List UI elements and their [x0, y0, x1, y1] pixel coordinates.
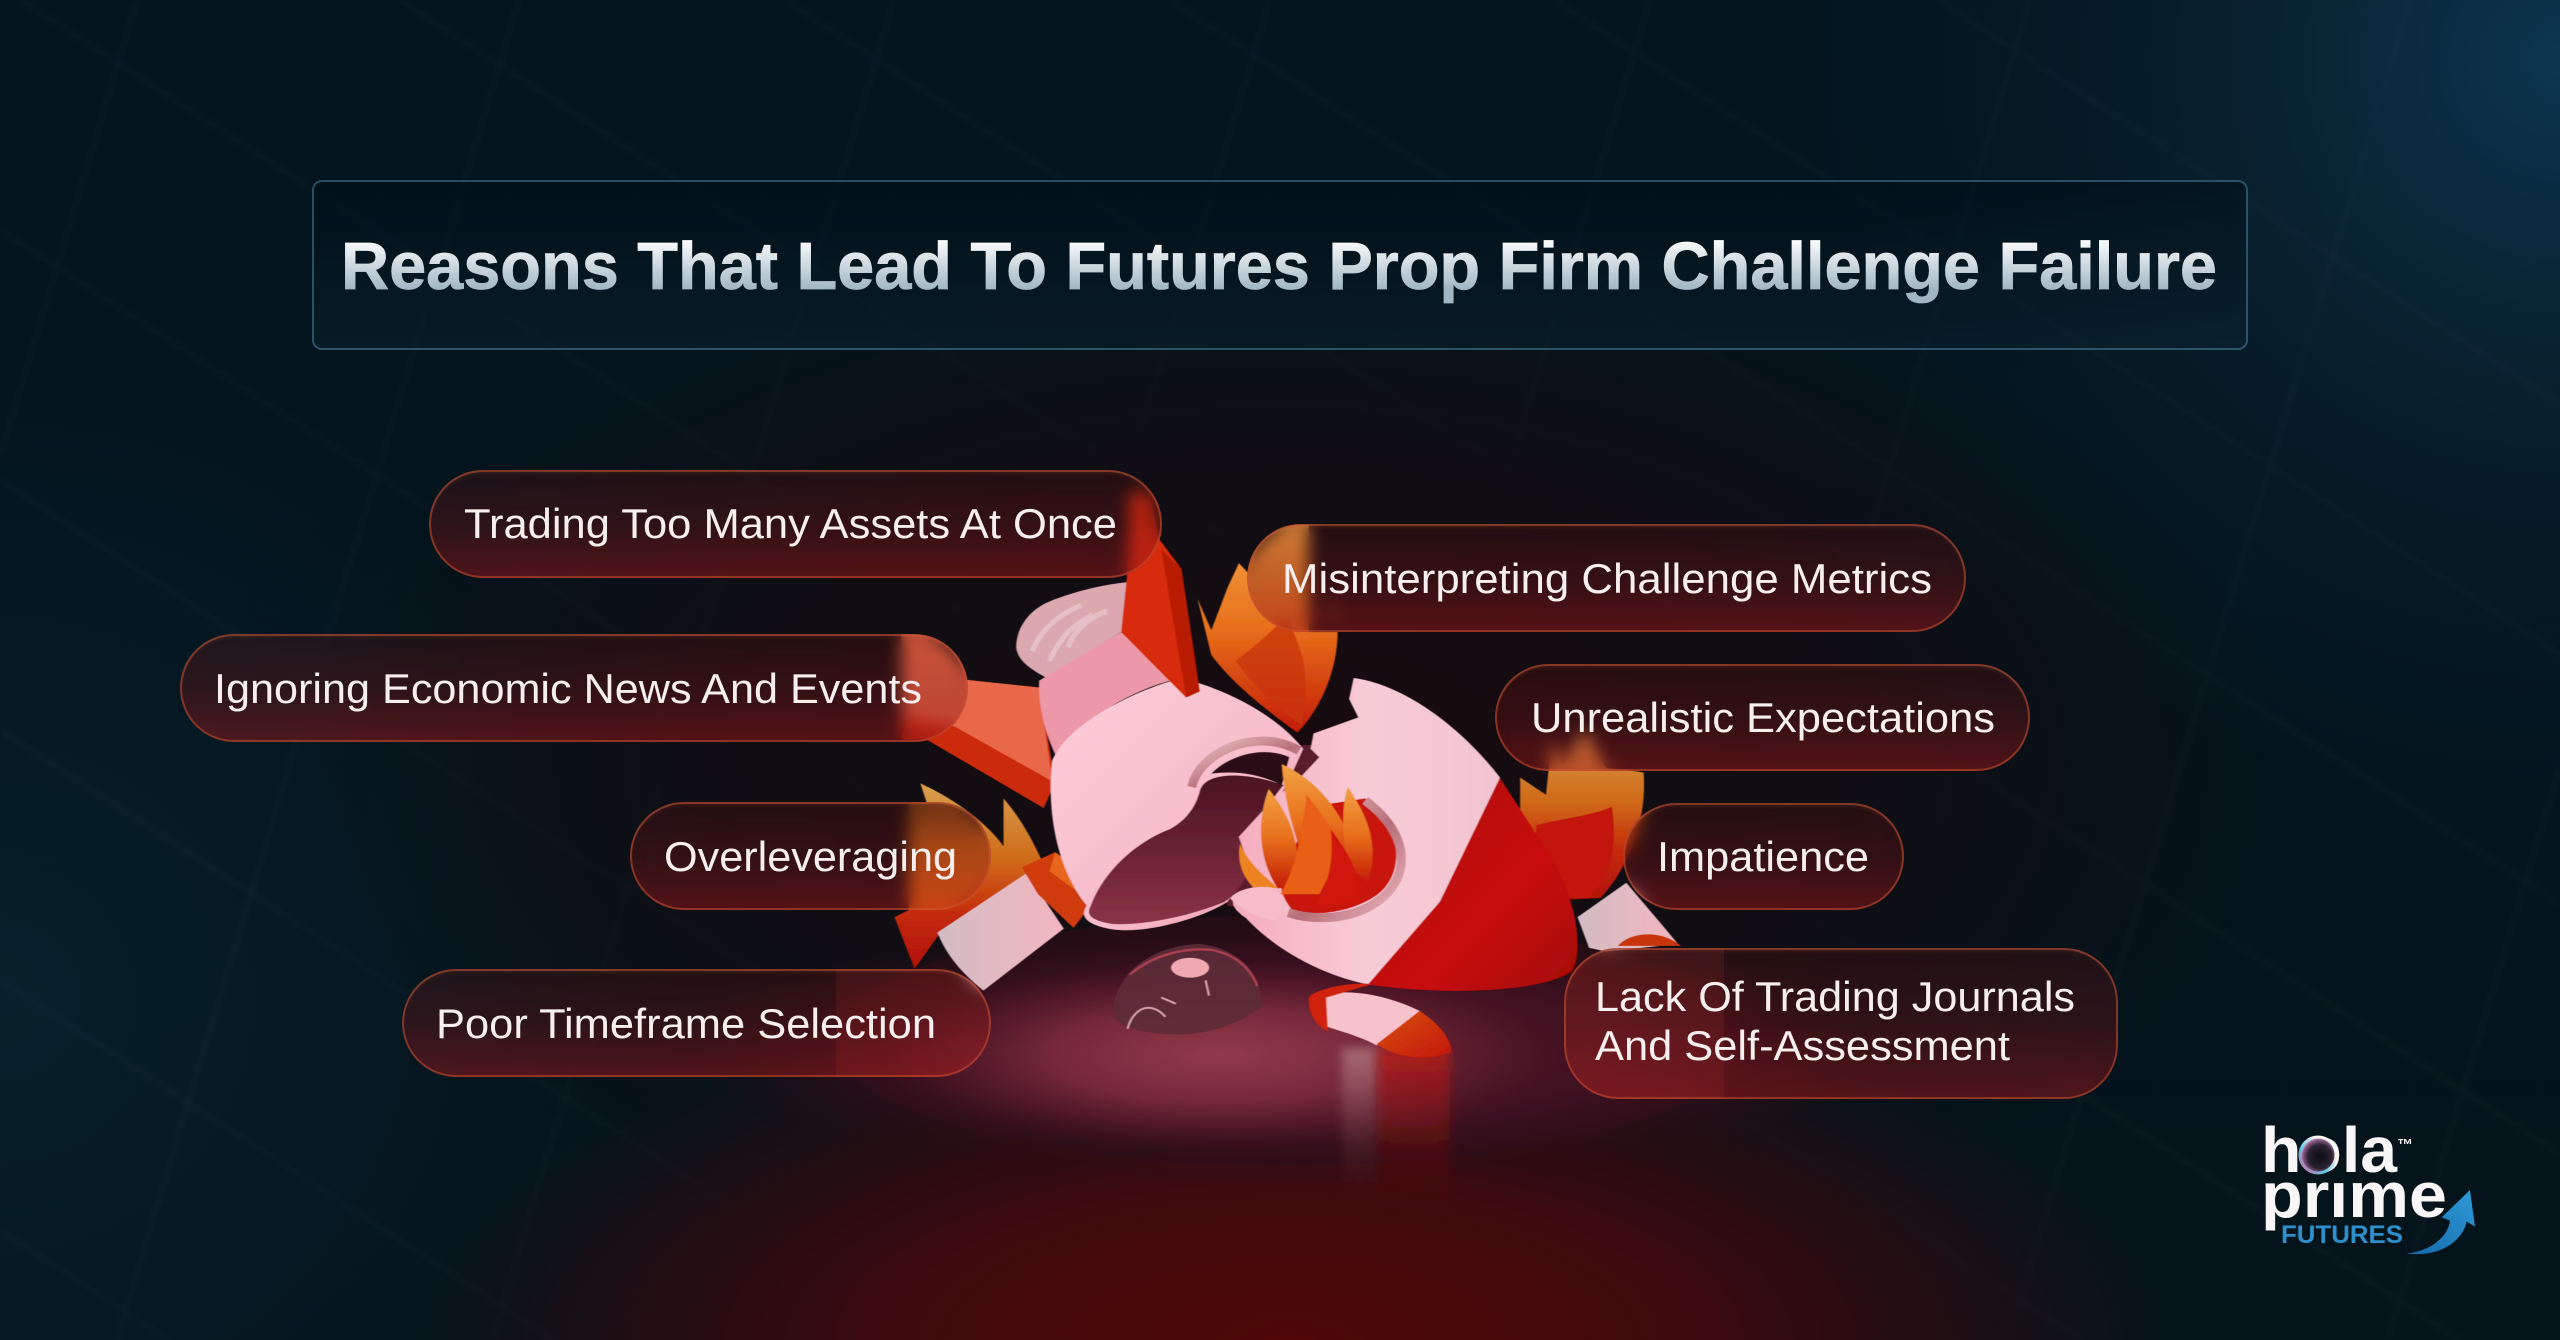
pill: trading too many assets	[429, 470, 1162, 578]
pill: impatience	[1623, 803, 1904, 910]
glass dome	[1113, 944, 1262, 1034]
inner flames	[1239, 764, 1373, 906]
pill: lack of trading journals	[1564, 948, 2118, 1099]
pill: misinterpreting challenge metrics	[1247, 524, 1966, 632]
pill: misinterpreting challenge metrics: Misinterpreting Challenge Metrics	[1282, 555, 1932, 602]
mouth	[1281, 799, 1396, 913]
centre backing	[1204, 745, 1365, 915]
back flames right	[1520, 730, 1644, 902]
translucent cap	[1016, 582, 1127, 678]
pill: unrealistic expectations	[1495, 664, 2030, 771]
logo: hola prime futures	[2266, 1126, 2475, 1254]
pill: lack of trading journals: Lack Of Trading Journals	[1595, 973, 2075, 1020]
pill: impatience: Impatience	[1657, 833, 1869, 880]
title panel	[312, 180, 2248, 350]
pill: poor timeframe selection: Poor Timeframe Selection	[436, 1000, 936, 1047]
detached limb	[1309, 984, 1451, 1058]
lower lip	[1230, 887, 1292, 921]
pill: ignoring economic news	[180, 634, 968, 742]
logo: hola prime futures: FUTURES	[2281, 1221, 2403, 1249]
right arm	[1578, 883, 1681, 952]
title text: Reasons That Lead To Futures Prop Firm Challenge Failure	[341, 229, 2217, 304]
left fin	[901, 635, 1055, 808]
shell cavity	[1089, 776, 1284, 924]
pill: trading too many assets: Trading Too Many Assets At Once	[464, 500, 1117, 547]
pill: overleveraging	[630, 802, 991, 910]
collar band	[1039, 632, 1173, 754]
right shell red section	[1368, 776, 1578, 991]
logo: hola prime futures: hola	[2261, 1114, 2397, 1186]
side ring	[1288, 800, 1401, 918]
left arm	[937, 852, 1104, 991]
horn	[1121, 492, 1200, 697]
top ring	[1192, 741, 1299, 787]
pill: overleveraging: Overleveraging	[664, 833, 957, 880]
logo: hola prime futures: prime	[2261, 1159, 2447, 1231]
right shell body	[1233, 678, 1500, 984]
logo bubble	[2300, 1137, 2336, 1173]
pill: lack of trading journals: And Self-Assessment	[1595, 1022, 2010, 1069]
logo arrow	[2407, 1190, 2475, 1254]
back flames left	[894, 783, 1047, 969]
logo: hola prime futures: ™	[2397, 1137, 2413, 1154]
left shell body	[1051, 678, 1303, 930]
pill: ignoring economic news: Ignoring Economic News And Events	[214, 665, 922, 712]
back flames top	[1198, 525, 1338, 733]
pill: unrealistic expectations: Unrealistic Expectations	[1531, 694, 1995, 741]
pill: poor timeframe selection	[402, 969, 991, 1077]
